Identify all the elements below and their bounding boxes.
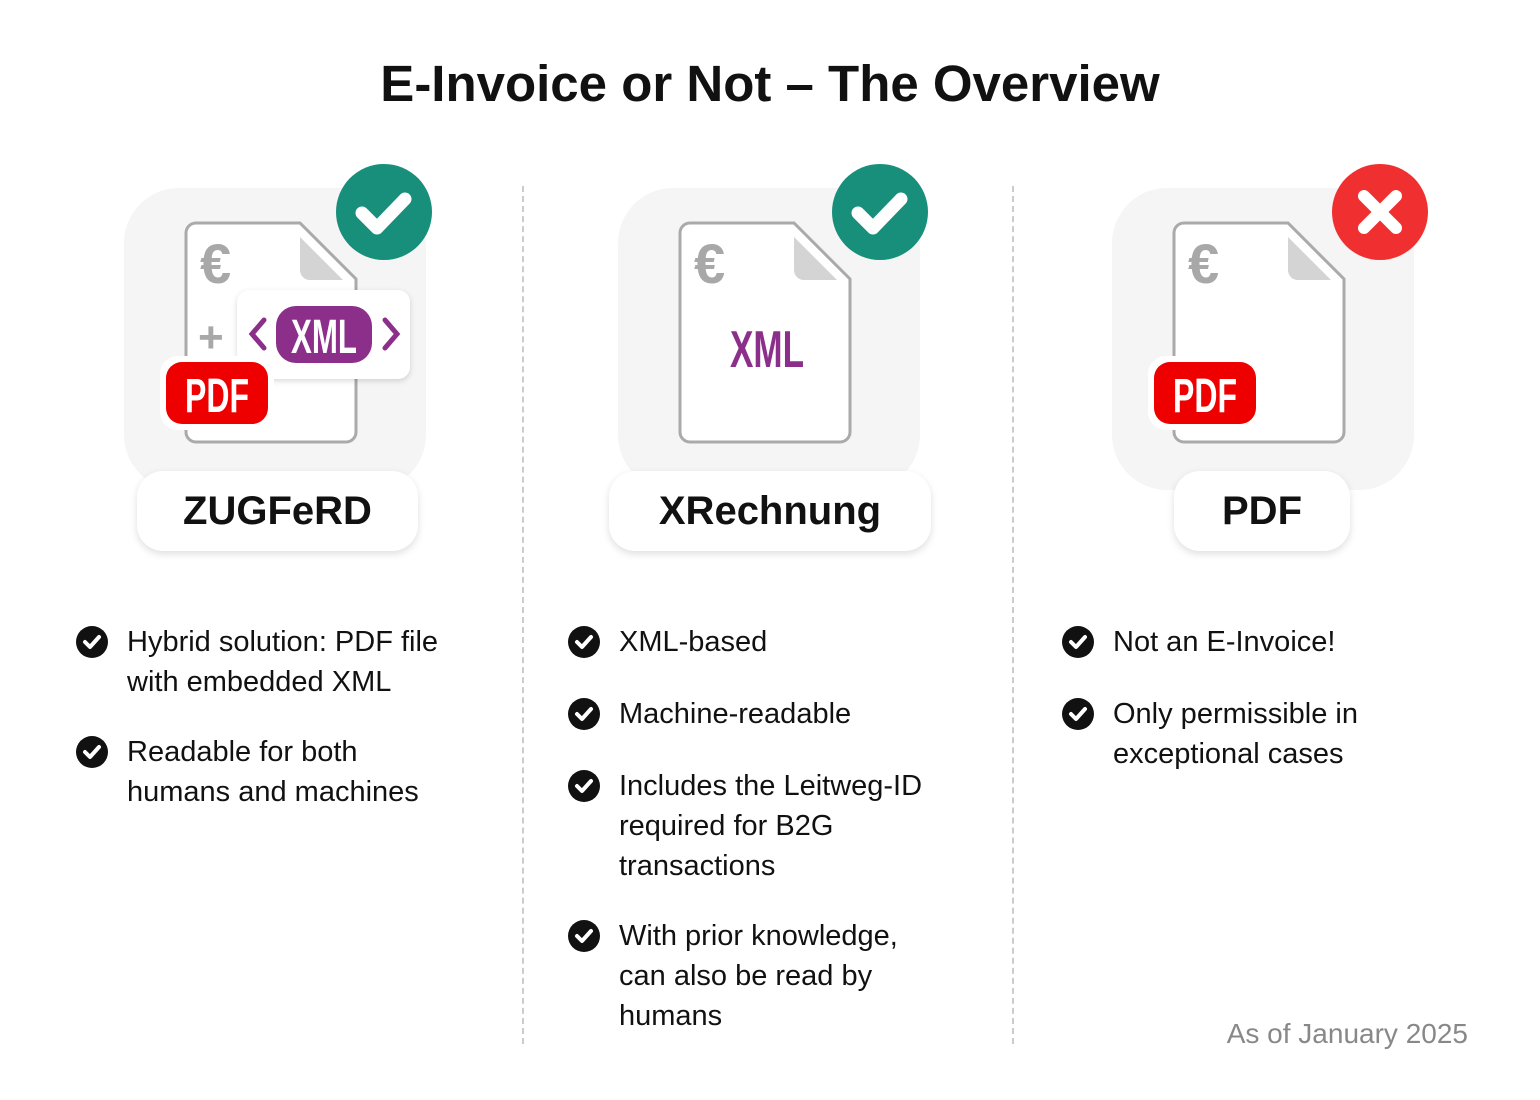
icon: ZUGFeRD: € <box>200 232 231 295</box>
label: ZUGFeRD <box>137 471 418 551</box>
list: ZUGFeRD: Readable for both <box>127 736 358 768</box>
list: PDF <box>1062 626 1358 770</box>
icon: ZUGFeRD: + <box>198 313 224 362</box>
icon: ZUGFeRD <box>124 164 432 478</box>
icon: XRechnung: XML <box>730 321 804 379</box>
icon: ZUGFeRD: XML <box>291 311 357 364</box>
list: XRechnung: required for B2G <box>619 810 833 842</box>
icon: XRechnung: € <box>694 232 725 295</box>
list: XRechnung: XML-based <box>619 626 767 658</box>
list: XRechnung: humans <box>619 1000 722 1032</box>
list: XRechnung: can also be read by <box>619 960 872 992</box>
label: PDF <box>1174 471 1350 551</box>
list: ZUGFeRD <box>76 626 438 808</box>
list: ZUGFeRD: Hybrid solution: PDF file <box>127 626 438 658</box>
icon: PDF: € <box>1188 232 1219 295</box>
list: XRechnung <box>568 626 922 1032</box>
footer note: As of January 2025 <box>1227 1018 1468 1049</box>
label: XRechnung <box>609 471 931 551</box>
list: ZUGFeRD: humans and machines <box>127 776 419 808</box>
icon: PDF <box>1112 164 1428 490</box>
list: XRechnung: With prior knowledge, <box>619 920 898 952</box>
label: PDF: PDF <box>1222 489 1302 533</box>
list: ZUGFeRD: with embedded XML <box>127 666 391 698</box>
title: E-Invoice or Not – The Overview <box>380 55 1160 112</box>
list: PDF: Not an E-Invoice! <box>1113 626 1335 658</box>
list: XRechnung: Machine-readable <box>619 698 851 730</box>
label: ZUGFeRD: ZUGFeRD <box>183 489 372 533</box>
icon: PDF: PDF <box>1173 370 1237 423</box>
icon: XRechnung <box>618 164 928 471</box>
label: XRechnung: XRechnung <box>659 489 881 533</box>
list: PDF: Only permissible in <box>1113 698 1358 730</box>
list: XRechnung: transactions <box>619 850 775 882</box>
list: XRechnung: Includes the Leitweg-ID <box>619 770 922 802</box>
list: PDF: exceptional cases <box>1113 738 1344 770</box>
icon: ZUGFeRD: PDF <box>185 370 249 423</box>
